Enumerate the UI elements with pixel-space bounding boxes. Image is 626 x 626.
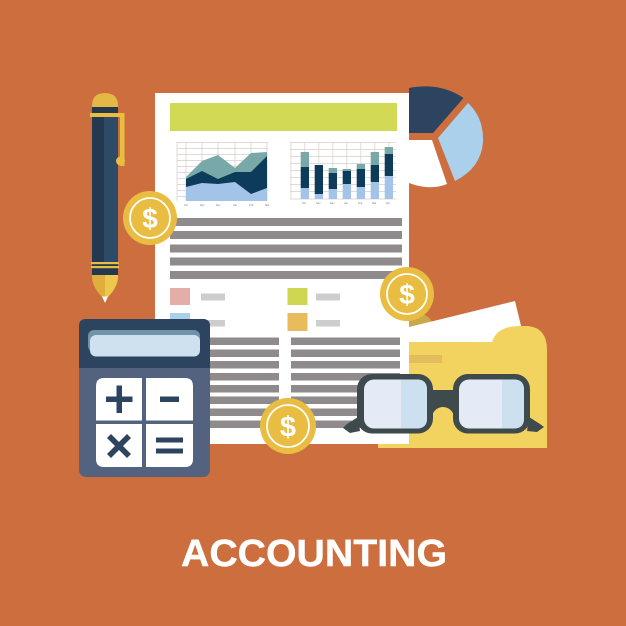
stacked bar chart: Jan bbox=[344, 202, 349, 205]
text columns bbox=[200, 338, 400, 428]
folder back bbox=[405, 315, 435, 345]
stacked bar chart: Feb bbox=[358, 202, 363, 205]
area chart: Feb bbox=[249, 204, 254, 207]
coin: bottom bbox=[260, 398, 316, 454]
calculator keys bbox=[96, 378, 193, 467]
coin: left: $ bbox=[142, 203, 158, 234]
legend bbox=[170, 288, 340, 331]
right lens bbox=[459, 380, 524, 428]
folder bbox=[378, 301, 547, 448]
pen clip bbox=[90, 113, 124, 166]
pie chart bbox=[409, 86, 483, 187]
coin: right: $ bbox=[399, 279, 415, 310]
coin: left bbox=[123, 191, 177, 245]
glasses arms bbox=[343, 417, 360, 433]
area chart: Nov bbox=[200, 204, 205, 207]
document page bbox=[155, 93, 409, 444]
glasses bridge bbox=[430, 390, 456, 420]
calculator symbols bbox=[106, 386, 183, 458]
folder front bbox=[378, 326, 547, 448]
folder label bbox=[405, 355, 442, 363]
paper in folder bbox=[405, 301, 522, 345]
left lens bbox=[364, 380, 427, 428]
coin: bottom: $ bbox=[280, 412, 296, 444]
pen tip bbox=[92, 275, 105, 298]
title: ACCOUNTING bbox=[181, 533, 447, 575]
area chart: Jan bbox=[233, 204, 238, 207]
text lines bbox=[170, 218, 402, 279]
coin: right bbox=[380, 267, 434, 321]
area chart: Oct bbox=[184, 204, 188, 207]
stacked bar chart bbox=[290, 142, 396, 205]
area chart: Dec bbox=[216, 204, 221, 207]
glasses bbox=[343, 374, 544, 434]
calculator bbox=[79, 319, 210, 477]
area chart bbox=[177, 142, 269, 207]
stacked bar chart: Mar bbox=[372, 202, 376, 205]
pen bbox=[90, 93, 125, 303]
stacked bar chart: Oct bbox=[302, 202, 306, 205]
calculator screen bbox=[88, 330, 200, 356]
area chart: Mar bbox=[265, 204, 269, 207]
document header bar bbox=[170, 103, 397, 131]
stacked bar chart: Dec bbox=[330, 202, 335, 205]
stacked bar chart: Apr bbox=[386, 202, 390, 205]
stacked bar chart: Nov bbox=[316, 202, 321, 205]
